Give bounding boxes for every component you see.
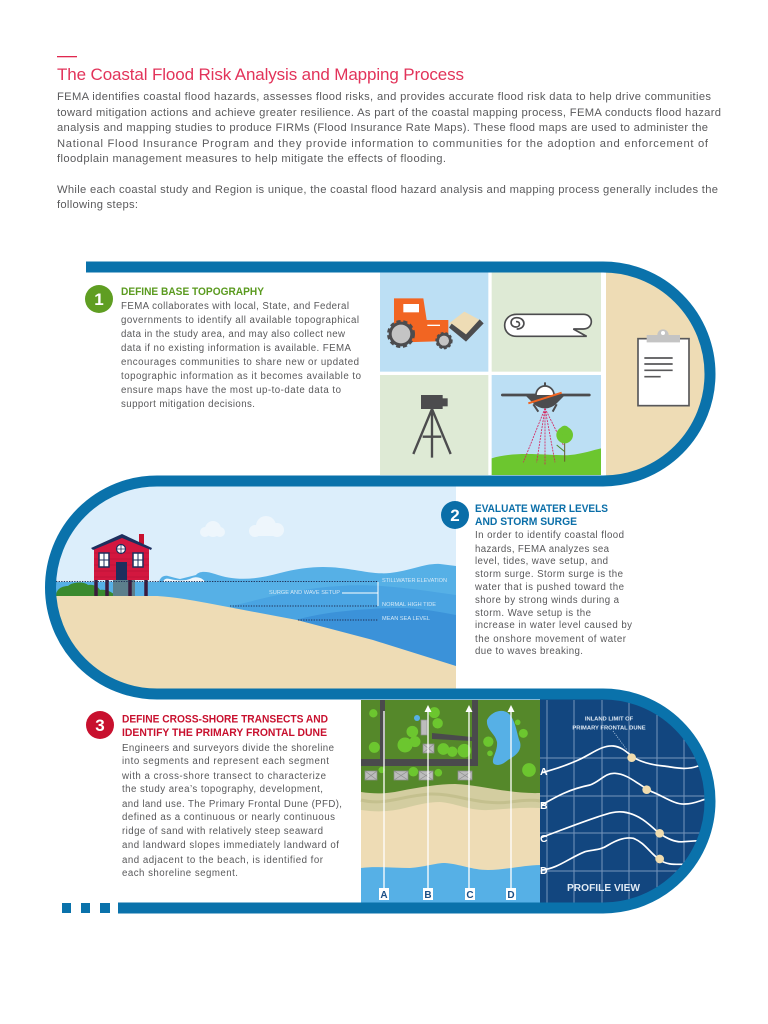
icon: bush [56, 582, 116, 596]
transect labels: C [466, 890, 474, 901]
bracket [342, 582, 378, 606]
pond [487, 711, 520, 765]
panel: step 3 profile view [540, 700, 704, 902]
step 2 number badge [441, 501, 469, 529]
title accent rule [57, 56, 77, 57]
step 3 text: and land use. The Primary Frontal Dune (PFD), [122, 799, 342, 810]
step 2 text: In order to identify coastal flood [475, 530, 624, 541]
panel: step 2 storm surge scene [56, 486, 456, 688]
inland limit label [572, 716, 646, 730]
water level labels: MEAN SEA LEVEL [382, 616, 430, 622]
water level labels: SURGE AND WAVE SETUP [269, 590, 340, 596]
icon: clipboard [638, 329, 689, 406]
step 1 text [121, 301, 361, 410]
step 2 number badge: 2 [450, 506, 460, 525]
water level labels [269, 578, 447, 622]
step 3 text [121, 743, 342, 879]
step 3 text: ridge of sand with relatively steep seaward [122, 826, 323, 837]
icon: clouds [200, 516, 284, 537]
profile letters: B [540, 800, 548, 812]
intro text: analysis and mapping studies to produce FIRMs (Flood Insurance Rate Maps). These flood maps are used to administer the [57, 122, 708, 134]
step 2 text: water that is pushed toward the [474, 582, 624, 593]
title: The Coastal Flood Risk Analysis and Mapping Process [57, 65, 464, 84]
white wave crest [163, 577, 205, 582]
step 1 text: governments to identify all available topographical [121, 315, 359, 326]
transect labels: B [424, 890, 432, 901]
step 3 heading: DEFINE CROSS-SHORE TRANSECTS AND [122, 714, 328, 726]
profile view label: PROFILE VIEW [567, 882, 640, 894]
transect arrows [384, 705, 514, 888]
deep water layer [298, 608, 456, 666]
intro text: following steps: [57, 199, 138, 211]
transect labels: D [507, 890, 515, 901]
icon: tractor [389, 298, 484, 348]
houses [365, 720, 472, 780]
step 1 heading: DEFINE BASE TOPOGRAPHY [121, 286, 265, 298]
step 3 text: with a cross-shore transect to characterize [121, 771, 326, 782]
icon: map scroll [505, 314, 591, 336]
step 1 number badge [85, 285, 113, 313]
intro text [57, 91, 721, 211]
step 1 text: ensure maps have the most up-to-date data to [121, 385, 341, 396]
step 2 text: hazards, FEMA analyzes sea [475, 544, 610, 555]
wave water layer [56, 564, 456, 608]
panel: clipboard background [603, 267, 710, 481]
profile letters [540, 768, 548, 874]
sand [56, 596, 456, 688]
step 2 text: due to waves breaking. [475, 646, 583, 657]
serpentine blue band [51, 267, 710, 908]
step 1 text: encourages communities to share new or updated [121, 357, 359, 368]
step 3 text: defined as a continuous or nearly continuous [122, 812, 335, 823]
step 3 text: into segments and represent each segment [122, 756, 329, 767]
icon: survey plane [492, 382, 601, 475]
step 3 text: and landward slopes immediately landward of [122, 840, 339, 851]
step 3 text: each shoreline segment. [122, 868, 238, 879]
icon: house on stilts [91, 534, 152, 596]
step 2 text: shore by strong winds during a [475, 595, 620, 606]
water level labels: STILLWATER ELEVATION [382, 578, 447, 584]
step 1 text: topographic information as it becomes available to [121, 371, 361, 382]
step 2 text: storm. Wave setup is the [475, 608, 591, 619]
inland limit dots [627, 753, 664, 863]
step 1 text: support mitigation decisions. [121, 399, 255, 410]
step 2 text: increase in water level caused by [475, 620, 632, 631]
profile curves [542, 746, 705, 870]
step 2 text: the onshore movement of water [475, 634, 627, 645]
inland limit label: PRIMARY FRONTAL DUNE [572, 726, 646, 732]
roads [361, 700, 478, 766]
profile letters: A [540, 766, 548, 778]
icon: tripod camera [413, 395, 451, 458]
step 2 heading: AND STORM SURGE [475, 516, 577, 528]
panel: step 1 images [380, 272, 601, 475]
step 3 number badge: 3 [95, 716, 105, 735]
transect labels: A [380, 890, 388, 901]
intro text: FEMA identifies coastal flood hazards, assesses flood risks, and provides accurate flood risk data to help drive communities [57, 91, 711, 103]
step 3 text: the study area’s topography, development, [122, 784, 323, 795]
intro text: floodplain management measures to help mitigate the effects of flooding. [57, 153, 446, 165]
step 3 number badge [86, 711, 114, 739]
step 3 heading [122, 714, 328, 739]
profile letters: C [540, 833, 548, 845]
intro text: toward mitigation actions and achieve greater resilience. As part of the coastal mapping process, FEMA conducts flood hazard [57, 107, 721, 119]
intro text: National Flood Insurance Program and they provide information to communities for the adoption and enforcement of [57, 138, 709, 150]
dotted leader [613, 731, 627, 750]
water level labels: NORMAL HIGH TIDE [382, 602, 436, 608]
profile letters: D [540, 865, 548, 877]
step 1 text: FEMA collaborates with local, State, and Federal [121, 301, 349, 312]
transect labels [379, 888, 516, 901]
step 1 text: data if no existing information is available. FEMA [121, 343, 352, 354]
trees [370, 708, 535, 776]
dotted water level lines [56, 582, 378, 620]
step 2 text: level, tides, wave setup, and [475, 556, 608, 567]
mid water layer [232, 586, 456, 620]
band squares [62, 903, 110, 913]
panel: step 3 aerial map [361, 700, 540, 903]
step 2 heading [475, 503, 608, 528]
step 1 number badge: 1 [94, 290, 104, 309]
step 2 text [474, 530, 632, 657]
step 3 text: and adjacent to the beach, is identified for [122, 855, 324, 866]
intro text: While each coastal study and Region is unique, the coastal flood hazard analysis and mapping process generally includes the [57, 184, 718, 196]
step 3 heading: IDENTIFY THE PRIMARY FRONTAL DUNE [122, 727, 327, 739]
inland limit label: INLAND LIMIT OF [585, 716, 634, 722]
step 2 heading: EVALUATE WATER LEVELS [475, 503, 608, 515]
step 3 text: Engineers and surveyors divide the shoreline [122, 743, 334, 754]
step 2 text: storm surge. Storm surge is the [475, 569, 623, 580]
step 1 text: data in the study area, and may also collect new [121, 329, 346, 340]
